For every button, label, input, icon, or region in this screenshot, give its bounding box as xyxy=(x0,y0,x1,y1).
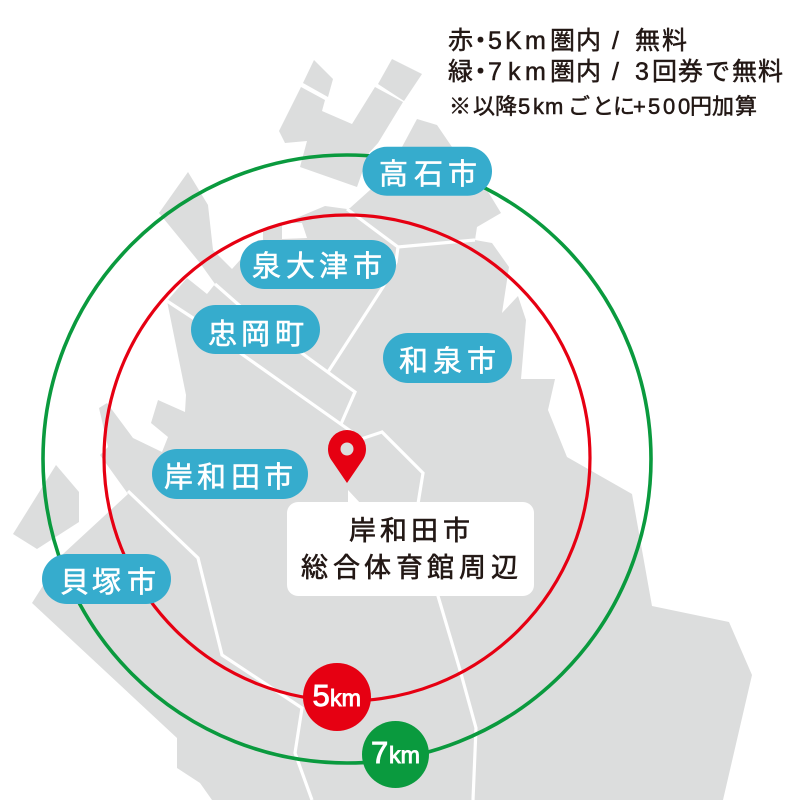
icon: location pin xyxy=(328,430,366,483)
label: 和泉市: 和泉市 xyxy=(399,345,496,378)
label: 高石市: 高石市 xyxy=(379,158,477,191)
label: 岸和田市 xyxy=(152,449,308,499)
label: 貝塚市 xyxy=(42,554,171,604)
label: 泉大津市: 泉大津市 xyxy=(252,250,382,283)
label: 忠岡町: 忠岡町 xyxy=(208,319,304,351)
badge: 5km: km xyxy=(330,685,361,711)
callout: facility name: 岸和田市 xyxy=(349,516,470,546)
label: 高石市 xyxy=(362,147,492,196)
badge: 7km: 7 xyxy=(371,735,388,770)
badge: 7km xyxy=(362,721,429,788)
badge: 5km: 5 xyxy=(312,678,330,713)
ring: 5km red xyxy=(104,215,590,701)
ring: 7km green xyxy=(43,155,651,763)
legend note: ※以降5kmごとに+500円加算 xyxy=(449,94,757,119)
legend text xyxy=(448,27,783,119)
white hole in map xyxy=(282,223,307,239)
callout: facility name: 総合体育館周辺 xyxy=(301,553,518,583)
badge: 5km xyxy=(303,663,371,731)
label: 和泉市 xyxy=(383,333,512,383)
legend line: green zone: 緑・7km圏内/3回券で無料 xyxy=(448,58,783,86)
label: 岸和田市: 岸和田市 xyxy=(164,461,293,494)
legend line: red zone: 赤・5Km圏内/無料 xyxy=(448,27,687,55)
label: 貝塚市: 貝塚市 xyxy=(60,566,156,599)
label: 泉大津市 xyxy=(240,240,396,289)
label: 忠岡町 xyxy=(191,305,320,354)
badge: 7km: km xyxy=(389,742,420,768)
callout: facility name xyxy=(287,490,534,596)
